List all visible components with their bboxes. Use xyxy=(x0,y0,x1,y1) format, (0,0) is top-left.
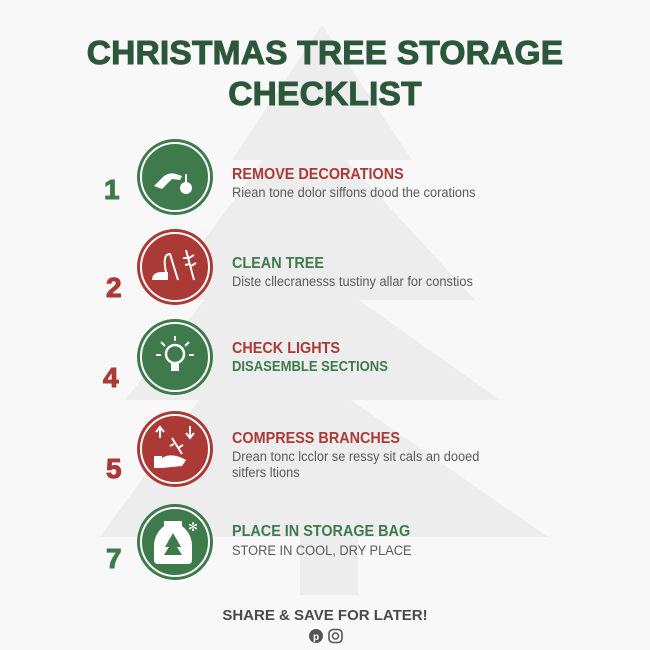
icon: storage bag with tree: ✻ xyxy=(188,520,198,534)
icon: hands compressing branches xyxy=(137,411,213,487)
text: DISASEMBLE SECTIONS xyxy=(232,359,388,375)
icon: light bulb xyxy=(137,319,213,395)
text: Diste cllecranesss tustiny allar for constios xyxy=(232,274,473,289)
icon: hand with ornament xyxy=(137,139,213,215)
icon: storage bag with tree xyxy=(137,504,213,580)
icon: vacuum and branch xyxy=(137,229,213,305)
text: COMPRESS BRANCHES xyxy=(232,430,400,447)
title: CHRISTMAS TREE STORAGE xyxy=(87,35,563,72)
step 2 xyxy=(106,229,473,305)
step 1 xyxy=(104,139,476,215)
text: Drean tonc lcclor se ressy sit cals an dooed xyxy=(232,449,479,464)
text: 5 xyxy=(106,453,122,484)
text: PLACE IN STORAGE BAG xyxy=(232,523,410,540)
text: 1 xyxy=(104,174,120,205)
step 4 xyxy=(106,411,479,487)
icons: social: p xyxy=(313,632,319,643)
text: Riean tone dolor siffons dood the corations xyxy=(232,185,476,200)
step 5 xyxy=(106,504,412,580)
text: sitfers ltions xyxy=(232,465,300,480)
text: CHECKLIST xyxy=(228,76,422,113)
text: STORE IN COOL, DRY PLACE xyxy=(232,543,412,558)
text: CHECK LIGHTS xyxy=(232,340,340,357)
text: 4 xyxy=(103,362,119,393)
text: REMOVE DECORATIONS xyxy=(232,166,404,183)
text: CLEAN TREE xyxy=(232,255,324,272)
text: 2 xyxy=(106,272,122,303)
step 3 xyxy=(102,319,388,395)
footer: SHARE & SAVE FOR LATER! xyxy=(222,607,428,624)
icons: social xyxy=(309,628,343,644)
text: 7 xyxy=(106,543,122,574)
